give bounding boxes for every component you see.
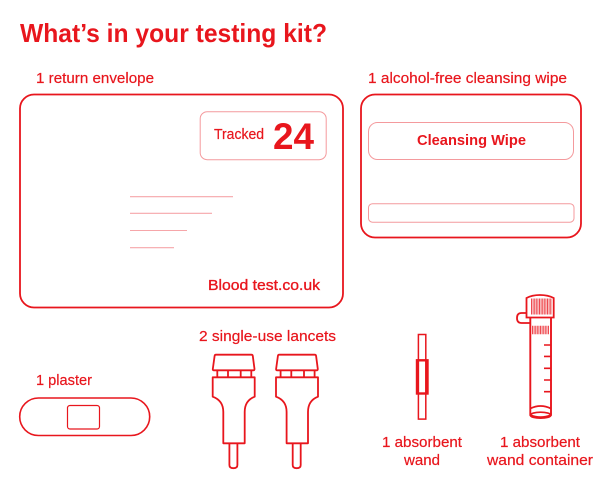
panel: cleansing wipe [361, 94, 581, 238]
envelope outline [20, 94, 343, 308]
label: plaster: 1 plaster [36, 372, 92, 389]
container loop [517, 313, 530, 323]
panel: return envelope [20, 94, 343, 308]
wipe label text: Cleansing Wipe [417, 133, 526, 149]
icon: absorbent wand container [517, 295, 554, 418]
icon: lancet right [276, 355, 318, 468]
wipe label box [368, 122, 574, 160]
label: lancets: 2 single-use lancets [199, 328, 336, 345]
label: absorbent wand: 1 absorbent [382, 434, 463, 451]
address lines [130, 197, 233, 248]
scale ticks [544, 345, 550, 392]
container cap [526, 295, 554, 318]
icon: absorbent wand [417, 334, 428, 419]
label: absorbent wand container: 1 absorbent [500, 434, 581, 451]
title: What’s in your testing kit? [20, 18, 327, 48]
tracked 24 postage box: 24 [273, 116, 314, 157]
tracked 24 postage box: Tracked [214, 127, 264, 143]
wipe outline [361, 94, 581, 238]
container tube [530, 318, 551, 417]
label: absorbent wand container: wand container [486, 452, 593, 469]
icon: lancet left [213, 355, 255, 468]
label: absorbent wand: wand [403, 452, 440, 469]
label: absorbent wand [382, 434, 463, 469]
label: return envelope: 1 return envelope [36, 70, 154, 87]
container base [530, 406, 551, 408]
tracked 24 postage box [200, 112, 326, 160]
wipe lower strip [368, 204, 574, 222]
icon: plaster [20, 398, 150, 436]
envelope brand text: Blood test.co.uk [208, 277, 321, 294]
label: cleansing wipe: 1 alcohol-free cleansing wipe [368, 70, 567, 87]
label: absorbent wand container [486, 434, 593, 469]
